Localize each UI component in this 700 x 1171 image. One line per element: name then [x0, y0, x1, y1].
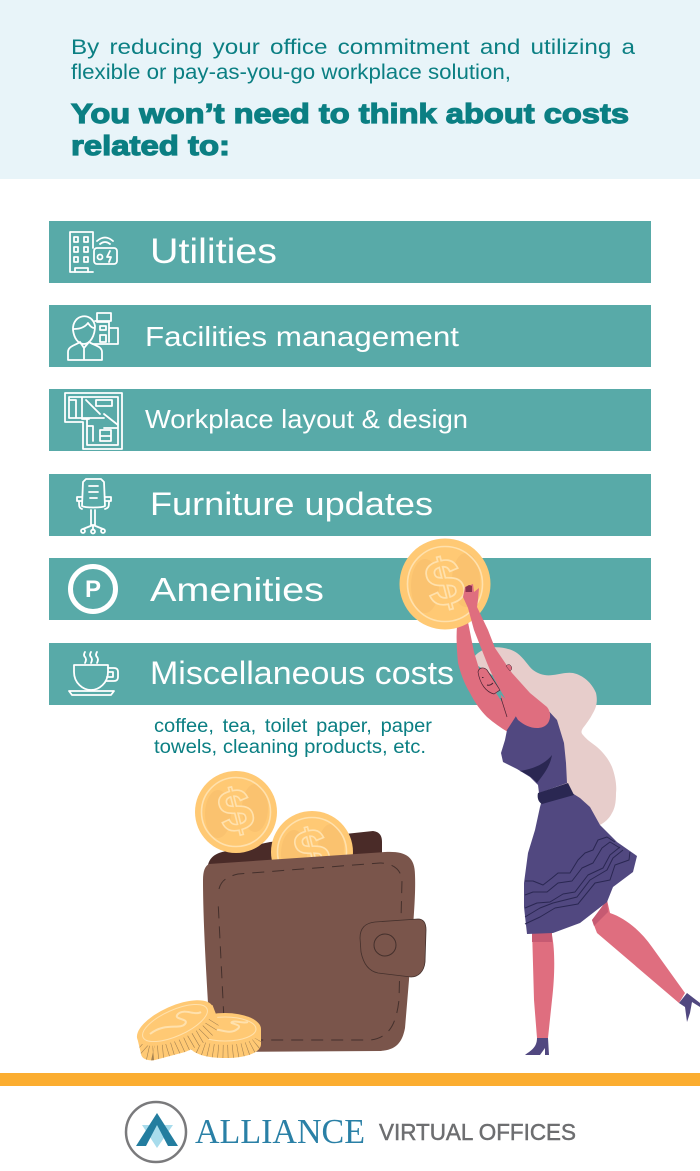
back shoe	[679, 993, 700, 1022]
back arm	[457, 622, 520, 732]
clasp button	[374, 934, 396, 956]
front shoe	[525, 1038, 549, 1055]
illustration: wallet with coins	[131, 771, 426, 1060]
skirt	[524, 793, 637, 934]
hair	[472, 647, 616, 825]
text: miscellaneous examples: coffee, tea, toilet paper, paper	[154, 716, 433, 737]
panel: workplace layout row	[49, 389, 651, 451]
wordmark: Virtual Offices: VIRTUAL OFFICES	[379, 1119, 576, 1145]
heading: You won’t need to think about costs	[71, 98, 629, 129]
coin: in wallet: $	[287, 814, 336, 887]
neck gap	[496, 691, 502, 702]
wallet stitching	[218, 863, 402, 1040]
panel: utilities row	[49, 221, 651, 283]
belt	[538, 783, 574, 804]
coin stack: left coin	[136, 1000, 219, 1060]
coin: held overhead: $	[418, 542, 471, 622]
coin stack: right coin	[189, 1013, 261, 1058]
face	[478, 668, 500, 694]
icon: manager and building	[68, 313, 118, 360]
neck line	[501, 698, 507, 717]
footer bar	[0, 1073, 700, 1086]
intro text	[71, 36, 635, 84]
logo: Alliance Virtual Offices	[126, 1102, 576, 1162]
icon: office chair	[77, 479, 111, 534]
coin: falling	[195, 771, 277, 853]
label: utilities: Utilities	[150, 232, 277, 271]
label: amenities: Amenities	[150, 571, 324, 608]
front leg shade	[532, 930, 552, 942]
ear	[506, 664, 512, 671]
header panel	[0, 0, 700, 179]
icon: coffee cup	[69, 652, 118, 695]
wordmark: Alliance: ALLIANCE	[195, 1112, 365, 1151]
intro text: flexible or pay-as-you-go workplace solution,	[71, 61, 511, 84]
panel: miscellaneous row	[49, 643, 651, 705]
heading: related to:	[71, 130, 230, 161]
panel: amenities row	[49, 558, 651, 620]
icon: parking sign	[70, 566, 116, 612]
heading	[71, 98, 629, 161]
icon: floor plan	[65, 393, 122, 449]
back leg shade	[592, 900, 608, 926]
back leg	[592, 900, 685, 1003]
wallet clasp	[360, 919, 426, 977]
label: facilities management: Facilities management	[145, 321, 459, 352]
fingers	[466, 585, 472, 592]
dress bodice	[501, 707, 567, 793]
icon: building with utilities	[70, 232, 117, 272]
front leg	[532, 928, 554, 1038]
text: miscellaneous examples: towels, cleaning products, etc.	[154, 737, 426, 758]
panel: furniture row	[49, 474, 651, 536]
label: workplace layout: Workplace layout & design	[145, 404, 468, 434]
front arm with hand	[463, 584, 550, 728]
facial features	[482, 678, 493, 685]
dress shadow	[520, 755, 552, 783]
intro text: By reducing your office commitment and utilizing a	[71, 36, 635, 59]
wallet body	[203, 852, 415, 1052]
coin: in wallet	[271, 811, 353, 893]
logo mark	[126, 1102, 186, 1162]
icon: parking sign: P	[85, 576, 101, 603]
panel: facilities management row	[49, 305, 651, 367]
wallet back	[208, 831, 382, 868]
coin: held overhead	[400, 538, 490, 630]
label: furniture updates: Furniture updates	[150, 486, 433, 522]
label: miscellaneous costs: Miscellaneous costs	[150, 655, 454, 691]
coin: falling: $	[211, 774, 260, 847]
text: miscellaneous examples	[154, 716, 433, 758]
skirt wave lines	[525, 837, 630, 924]
illustration: woman lifting coin	[400, 538, 700, 1055]
